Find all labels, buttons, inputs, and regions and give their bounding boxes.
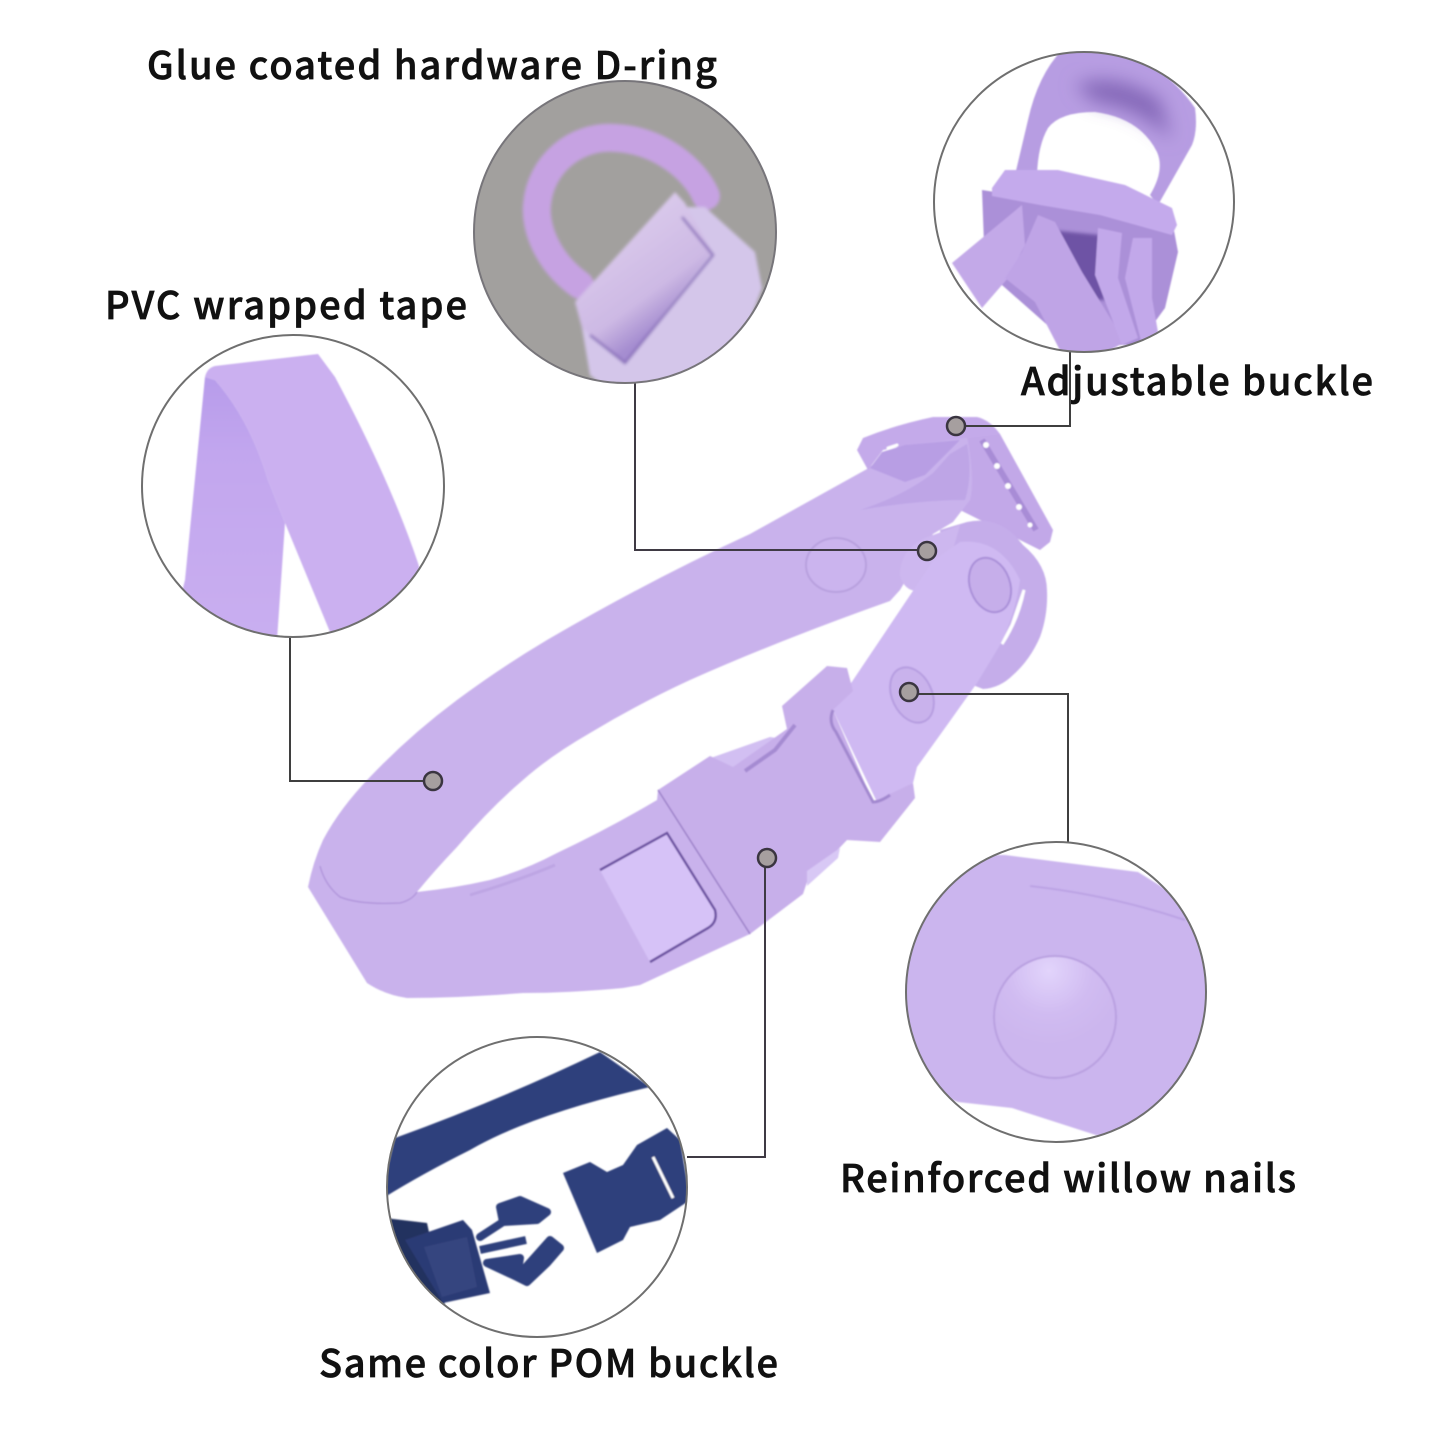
marker dots — [424, 417, 965, 867]
icon: tape front — [204, 353, 420, 632]
connector line: willow nails — [909, 694, 1068, 842]
buckle — [658, 666, 915, 934]
inner strap shading — [860, 444, 970, 510]
collar illustration — [308, 417, 1053, 998]
main band — [308, 436, 972, 998]
buckle lower arm — [807, 848, 840, 886]
icon: male buckle frame — [405, 1220, 490, 1303]
connector line: POM buckle — [687, 858, 765, 1157]
near strap — [833, 542, 1020, 802]
strap rivet upper — [962, 552, 1018, 618]
title: Reinforced willow nails: Reinforced willow nails — [840, 1148, 1296, 1203]
panel: D-ring detail — [473, 80, 777, 384]
strap rivet lower — [882, 660, 942, 730]
band crease — [470, 865, 555, 895]
buckle arm — [705, 737, 790, 785]
title: Same color POM buckle: Same color POM buckle — [319, 1333, 778, 1388]
icon: tape back fold — [182, 376, 286, 636]
adjustable buckle bar — [857, 417, 1000, 470]
icon: top bar — [992, 170, 1177, 235]
title: Glue coated hardware D-ring: Glue coated hardware D-ring — [147, 35, 717, 90]
panel: POM buckle detail — [380, 1037, 690, 1337]
fold line — [320, 866, 417, 903]
title: PVC wrapped tape: PVC wrapped tape — [105, 275, 467, 330]
icon: rivet — [994, 956, 1116, 1078]
panel: PVC tape detail — [142, 335, 444, 640]
icon: strap crease — [1030, 886, 1185, 920]
slider — [600, 833, 716, 962]
adjustable buckle back plate — [960, 430, 1053, 550]
icon: navy strap — [380, 1052, 650, 1200]
connector line: PVC tape — [290, 636, 433, 781]
icon: straps below — [982, 190, 1178, 345]
D-ring loop — [940, 521, 1047, 689]
icon: male buckle strap — [385, 1218, 445, 1305]
icon: D-ring — [537, 138, 706, 285]
connector nub — [900, 525, 960, 591]
icon: strap loop — [1015, 50, 1196, 205]
title: Adjustable buckle: Adjustable buckle — [1021, 351, 1373, 406]
panel: adjustable buckle detail — [934, 50, 1234, 360]
panel: willow nails detail — [900, 842, 1215, 1150]
connector line: adjustable buckle — [956, 352, 1070, 426]
band rivet — [806, 538, 866, 592]
icon: strap end — [580, 205, 764, 382]
icon: strap surface — [900, 855, 1215, 1150]
icon: buckle arms — [480, 1200, 560, 1282]
icon: loop shadow — [1075, 80, 1172, 140]
connector line: D-ring — [635, 382, 927, 550]
icon: roller — [575, 192, 712, 362]
D-ring gap — [1002, 590, 1024, 644]
icon: female buckle — [563, 1128, 690, 1253]
